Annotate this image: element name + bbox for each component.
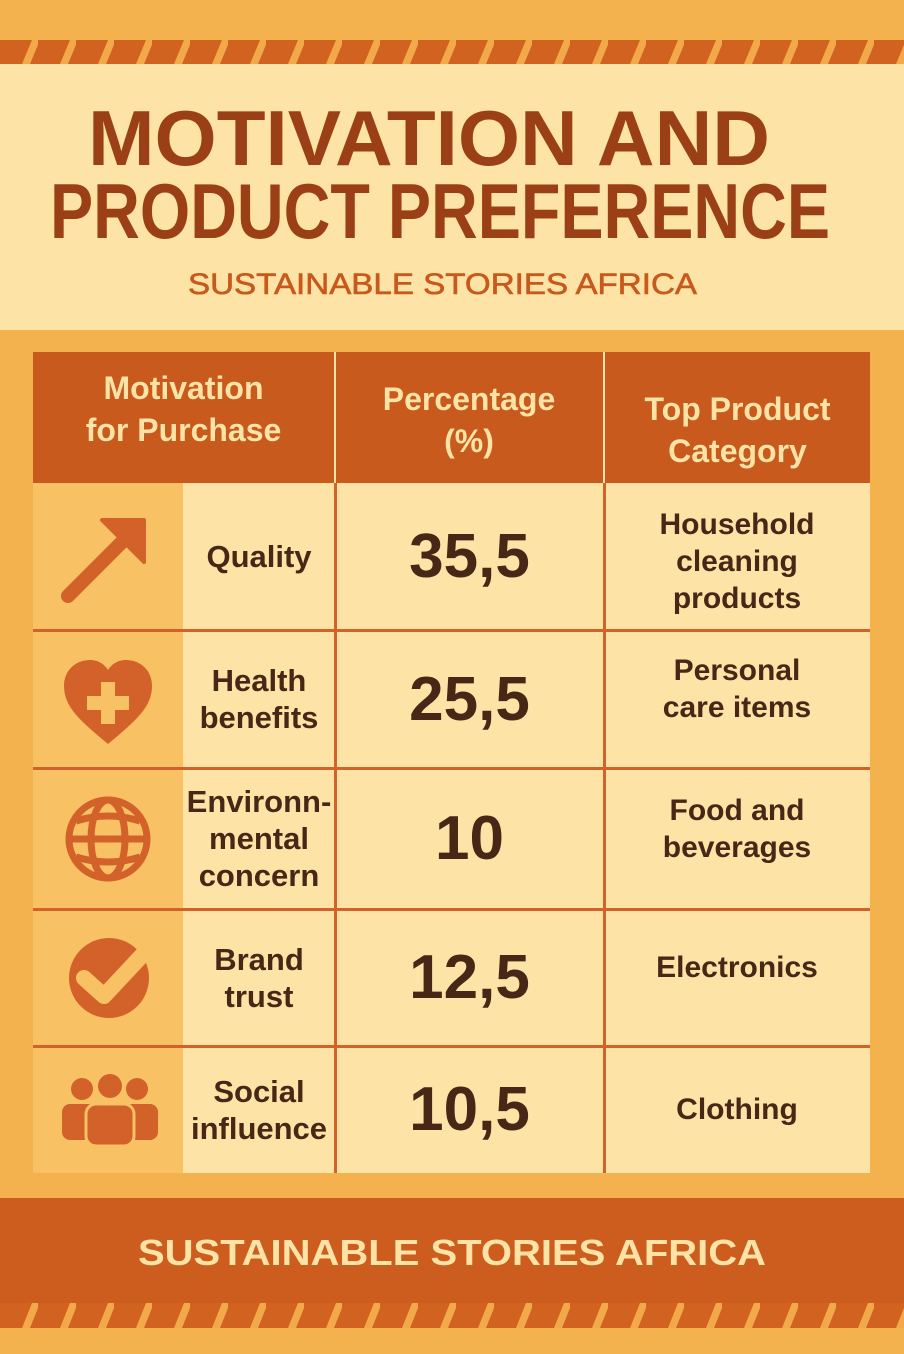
row 5 bbox=[191, 1074, 327, 1146]
icon: heart bbox=[64, 660, 152, 744]
table bbox=[33, 352, 870, 1173]
text: Electronics bbox=[656, 951, 818, 984]
footer band bbox=[0, 1198, 904, 1303]
top stripe band bbox=[0, 40, 904, 64]
grid lines bbox=[334, 483, 337, 1173]
icon: people bbox=[62, 1074, 158, 1144]
header: percentage: Percentage bbox=[383, 381, 555, 417]
text: beverages bbox=[663, 830, 811, 864]
header: percentage: (%) bbox=[444, 423, 494, 459]
text: care items bbox=[663, 691, 811, 724]
row 2: benefits bbox=[200, 700, 318, 735]
text: cleaning bbox=[676, 545, 798, 578]
row 4: Brand bbox=[214, 942, 304, 976]
header: category bbox=[644, 391, 831, 469]
row 2 bbox=[200, 663, 318, 735]
header: motivation: Motivation bbox=[104, 370, 263, 406]
row 3: concern bbox=[199, 858, 319, 893]
row 1: Quality bbox=[206, 539, 312, 574]
bottom stripe band bbox=[0, 1303, 904, 1328]
text: 35,5 bbox=[409, 522, 530, 591]
text: Personal bbox=[674, 654, 800, 687]
row 4 bbox=[214, 942, 304, 1014]
icon: arrow bbox=[61, 518, 146, 603]
header panel bbox=[0, 64, 904, 330]
row 3: Environn- bbox=[187, 784, 331, 819]
icon: check bbox=[69, 938, 149, 1018]
row 2: Health bbox=[212, 663, 306, 698]
footer text: SUSTAINABLE STORIES AFRICA bbox=[138, 1232, 766, 1273]
text: Household bbox=[660, 508, 814, 541]
text: products bbox=[673, 582, 801, 615]
header: category: Top Product bbox=[644, 391, 831, 427]
row 3: mental bbox=[209, 821, 309, 856]
title bbox=[50, 94, 830, 301]
text: 25,5 bbox=[409, 664, 530, 734]
text: 10 bbox=[435, 804, 504, 873]
icon column bbox=[33, 483, 183, 1173]
row 3 bbox=[187, 784, 331, 893]
header: percentage bbox=[383, 381, 555, 459]
text: 10,5 bbox=[409, 1075, 530, 1144]
icon: globe bbox=[66, 796, 150, 882]
header: motivation bbox=[86, 370, 281, 448]
row 5: influence bbox=[191, 1110, 327, 1146]
title: SUSTAINABLE STORIES AFRICA bbox=[188, 268, 697, 301]
header row bbox=[33, 352, 870, 483]
row 5: Social bbox=[213, 1074, 305, 1108]
row 4: trust bbox=[225, 978, 293, 1014]
text: Food and bbox=[670, 794, 804, 826]
header: motivation: for Purchase bbox=[86, 412, 281, 448]
title: MOTIVATION AND bbox=[88, 94, 770, 182]
header: category: Category bbox=[668, 433, 807, 469]
text: Clothing bbox=[676, 1093, 798, 1126]
text: 12,5 bbox=[409, 943, 530, 1012]
